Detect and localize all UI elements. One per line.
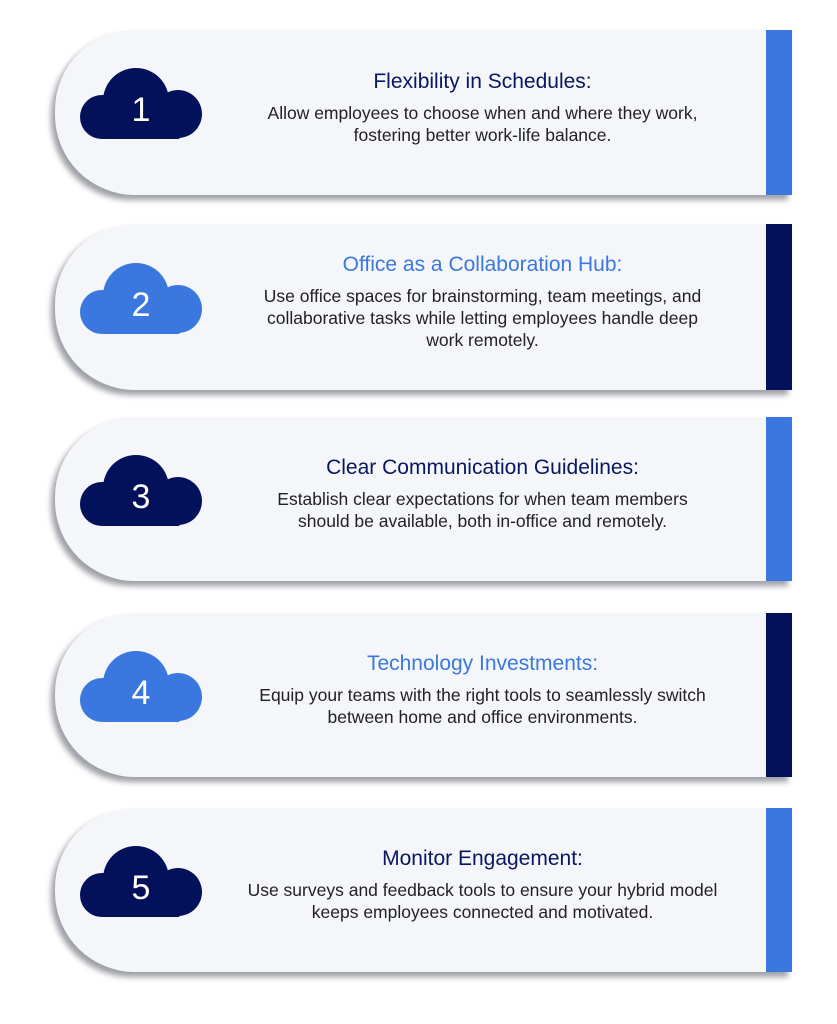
text 2: Use office spaces for brainstorming, team meetings, and: [264, 286, 701, 306]
text 2: [264, 253, 701, 350]
text 3: Establish clear expectations for when team members: [277, 489, 688, 509]
card 2: [55, 224, 792, 390]
text 5: Monitor Engagement:: [382, 847, 583, 870]
card 1: [55, 30, 792, 195]
text 3: [277, 456, 688, 531]
text 4: [259, 652, 706, 727]
icon: cloud 3: 3: [132, 478, 150, 516]
icon: cloud 1: 1: [132, 91, 150, 129]
text 2: Office as a Collaboration Hub:: [343, 253, 622, 276]
icon: cloud 2: 2: [132, 286, 150, 324]
text 3: should be available, both in-office and remotely.: [298, 511, 667, 531]
text 5: keeps employees connected and motivated.: [312, 902, 653, 922]
text 5: [248, 847, 717, 922]
icon: cloud 1: [80, 68, 202, 139]
text 1: fostering better work-life balance.: [354, 124, 611, 144]
text 1: Allow employees to choose when and where they work,: [268, 102, 697, 122]
accent bar 4: [766, 613, 792, 777]
icon: cloud 3: [80, 455, 202, 526]
text 2: collaborative tasks while letting employees handle deep: [267, 308, 698, 328]
text 4: Equip your teams with the right tools to seamlessly switch: [259, 685, 706, 705]
accent bar 1: [766, 30, 792, 195]
card 5: [55, 808, 792, 972]
text 5: Use surveys and feedback tools to ensure your hybrid model: [248, 880, 717, 900]
icon: cloud 5: 5: [132, 869, 150, 907]
accent bar 5: [766, 808, 792, 972]
accent bar 2: [766, 224, 792, 390]
card 3: [55, 417, 792, 581]
text 1: Flexibility in Schedules:: [373, 70, 592, 92]
icon: cloud 2: [80, 263, 202, 334]
text 3: Clear Communication Guidelines:: [326, 456, 639, 479]
text 4: Technology Investments:: [367, 652, 598, 675]
text 4: between home and office environments.: [327, 707, 638, 727]
text 2: work remotely.: [426, 330, 539, 350]
icon: cloud 5: [80, 846, 202, 917]
text 1: [268, 70, 697, 144]
accent bar 3: [766, 417, 792, 581]
icon: cloud 4: [80, 651, 202, 722]
icon: cloud 4: 4: [132, 674, 150, 712]
card 4: [55, 613, 792, 777]
